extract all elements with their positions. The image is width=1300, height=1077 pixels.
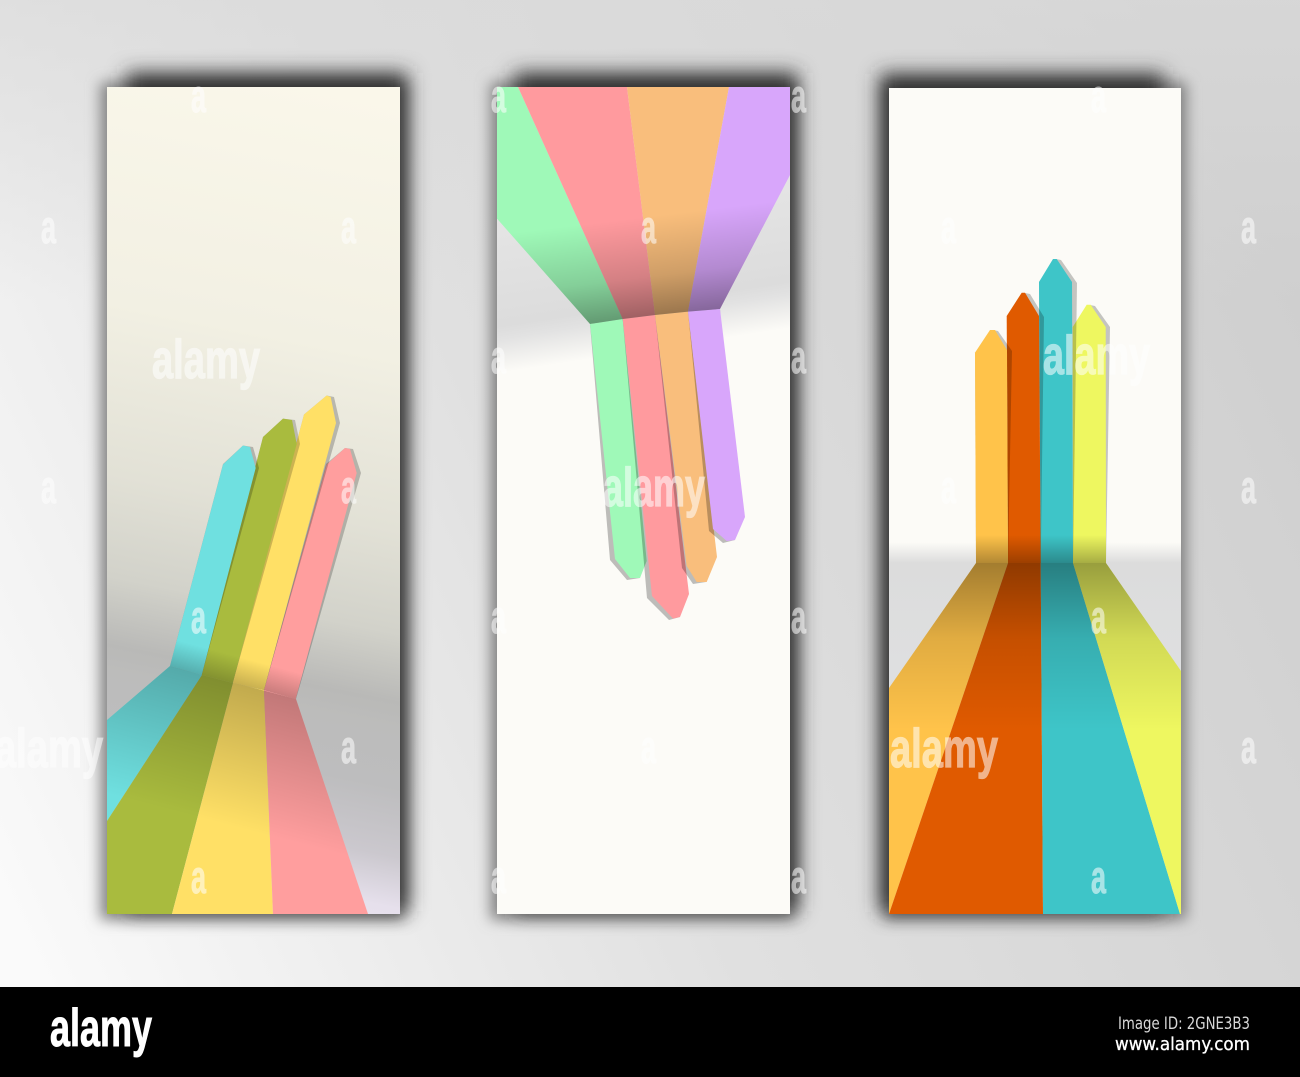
panel: right banner [880,74,1187,920]
watermarks [0,70,1256,903]
footer bar [0,987,1300,1077]
arrow: olive green [202,419,300,683]
watermarks: alamy [152,328,260,390]
watermarks: a [491,331,506,383]
watermarks: a [41,461,56,513]
arrow: teal [1039,259,1077,563]
footer logo: alamy [50,999,152,1058]
watermarks: a [341,461,356,513]
watermarks: a [1241,721,1256,773]
watermarks: a [191,591,206,643]
watermarks: alamy [890,717,998,779]
floor stripes: right banner [889,563,1181,914]
watermarks: a [1091,851,1106,903]
arrow: peach [655,312,717,584]
watermarks: a [941,201,956,253]
watermarks: a [791,70,806,122]
arrow: burnt orange [1007,293,1044,563]
watermarks: a [491,591,506,643]
arrow: yellow [233,396,340,690]
watermarks: a [791,851,806,903]
image id: Image ID: 2GNE3B3 [1118,1014,1250,1034]
watermarks: a [191,70,206,122]
watermarks: alamy [603,456,705,518]
arrow: amber [975,330,1012,563]
arrow: lime [1073,305,1110,563]
floor stripes: left banner [107,666,368,914]
watermarks: a [791,331,806,383]
panel: left banner [100,73,408,920]
watermarks: a [341,201,356,253]
watermarks: a [491,851,506,903]
watermarks: a [791,591,806,643]
panel: middle banner [490,73,798,920]
watermarks: a [191,851,206,903]
arrow: pink [264,448,361,699]
arrow: coral [623,315,689,620]
watermarks: a [641,201,656,253]
watermarks: a [41,201,56,253]
watermarks: a [1091,591,1106,643]
watermarks: a [641,721,656,773]
watermarks: a [1241,201,1256,253]
ceiling stripes: middle banner [497,87,790,324]
watermarks: a [1091,70,1106,122]
watermarks: a [341,721,356,773]
watermarks: a [941,461,956,513]
arrow: teal [170,446,259,675]
arrow: lilac [688,309,745,543]
arrow: mint [590,319,647,580]
watermarks: alamy [1043,324,1150,386]
watermarks: a [491,70,506,122]
watermarks: a [1241,461,1256,513]
website: www.alamy.com [1115,1034,1250,1055]
